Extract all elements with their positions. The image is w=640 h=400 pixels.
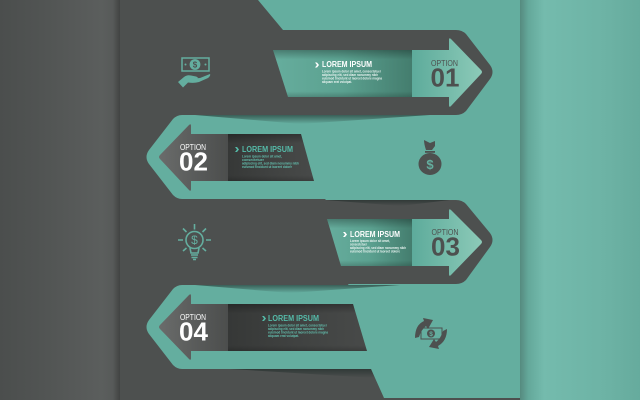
- option 2 text window: [228, 134, 314, 181]
- option 3 arrow band: [200, 200, 492, 284]
- option 1 number: 01: [431, 62, 459, 92]
- option 4 number: 04: [179, 316, 208, 346]
- option 2 body text: consectetuer: [242, 158, 265, 162]
- icon: money bag: [418, 140, 442, 175]
- option 1 arrow head: [412, 38, 482, 107]
- option 2 body text: [242, 154, 299, 169]
- option 4 arrow head: [159, 294, 228, 360]
- option 3 body text: euismod tincidunt ut laoreet dolore: [350, 250, 400, 254]
- icon: money exchange arrows: $: [429, 331, 433, 338]
- option 3 text window: [327, 219, 412, 266]
- option 2 label: OPTION: [180, 142, 206, 152]
- option 1 title: LOREM IPSUM: [322, 59, 372, 69]
- icon: hand holding banknote: $: [193, 60, 198, 69]
- icon: hand holding banknote: [178, 58, 210, 88]
- option 1 body text: [322, 70, 382, 84]
- option 4 text window: [228, 304, 367, 351]
- option 2 title: LOREM IPSUM: [242, 144, 293, 154]
- option 3 body text: adipiscing elit, sed diam nonummy nibh: [350, 246, 406, 250]
- option 1 body text: Lorem ipsum dolor sit amet, consectetuer: [322, 70, 382, 74]
- option 2 body text: adipiscing elit, sed diam nonummy nibh: [242, 162, 299, 166]
- option 1 arrow band: [200, 30, 492, 115]
- option 2 number: 02: [179, 146, 208, 176]
- option 4 body text: adipiscing elit, sed diam nonummy nibh: [268, 327, 324, 331]
- option 3 body text: consectetuer: [350, 242, 367, 246]
- option 4 body text: aliquam erat volutpat.: [268, 334, 299, 338]
- option 1 text window: [273, 50, 412, 97]
- option 3 arrow head: [412, 209, 482, 276]
- central panel: [120, 0, 520, 398]
- right background column: [520, 0, 640, 400]
- option 1 label: OPTION: [431, 58, 458, 68]
- icon: money exchange arrows: [415, 318, 447, 349]
- option 2 body text: euismod tincidunt ut laoreet dolore: [242, 165, 292, 169]
- option 2 body text: Lorem ipsum dolor sit amet,: [242, 154, 282, 158]
- option 4 label: OPTION: [180, 312, 206, 322]
- option 1 body text: adipiscing elit, sed diam nonummy nibh: [322, 73, 378, 77]
- left background column: [0, 0, 120, 400]
- icon: money bag: $: [426, 157, 434, 172]
- option 2 arrow band: [146, 115, 430, 199]
- option 2 arrow head: [159, 124, 228, 191]
- option 4 arrow band: [146, 285, 400, 378]
- option 4 body text: euismod tincidunt ut laoreet dolore magna: [268, 330, 328, 334]
- option 3 body text: Lorem ipsum dolor sit amet,: [350, 239, 390, 243]
- option 3 label: OPTION: [432, 227, 458, 237]
- option 3 number: 03: [431, 232, 460, 262]
- icon: light bulb with dollar: [178, 224, 211, 260]
- option 3 body text: [350, 239, 406, 254]
- option 3 title: LOREM IPSUM: [350, 229, 400, 239]
- option 4 title: LOREM IPSUM: [268, 313, 319, 323]
- option 1 body text: euismod tincidunt ut laoreet dolore magna: [322, 76, 382, 80]
- icon: light bulb with dollar: $: [191, 233, 198, 247]
- option 4 body text: Lorem ipsum dolor sit amet, consectetuer: [268, 324, 328, 328]
- option 1 body text: aliquam erat volutpat.: [322, 80, 352, 84]
- option 4 body text: [268, 324, 328, 338]
